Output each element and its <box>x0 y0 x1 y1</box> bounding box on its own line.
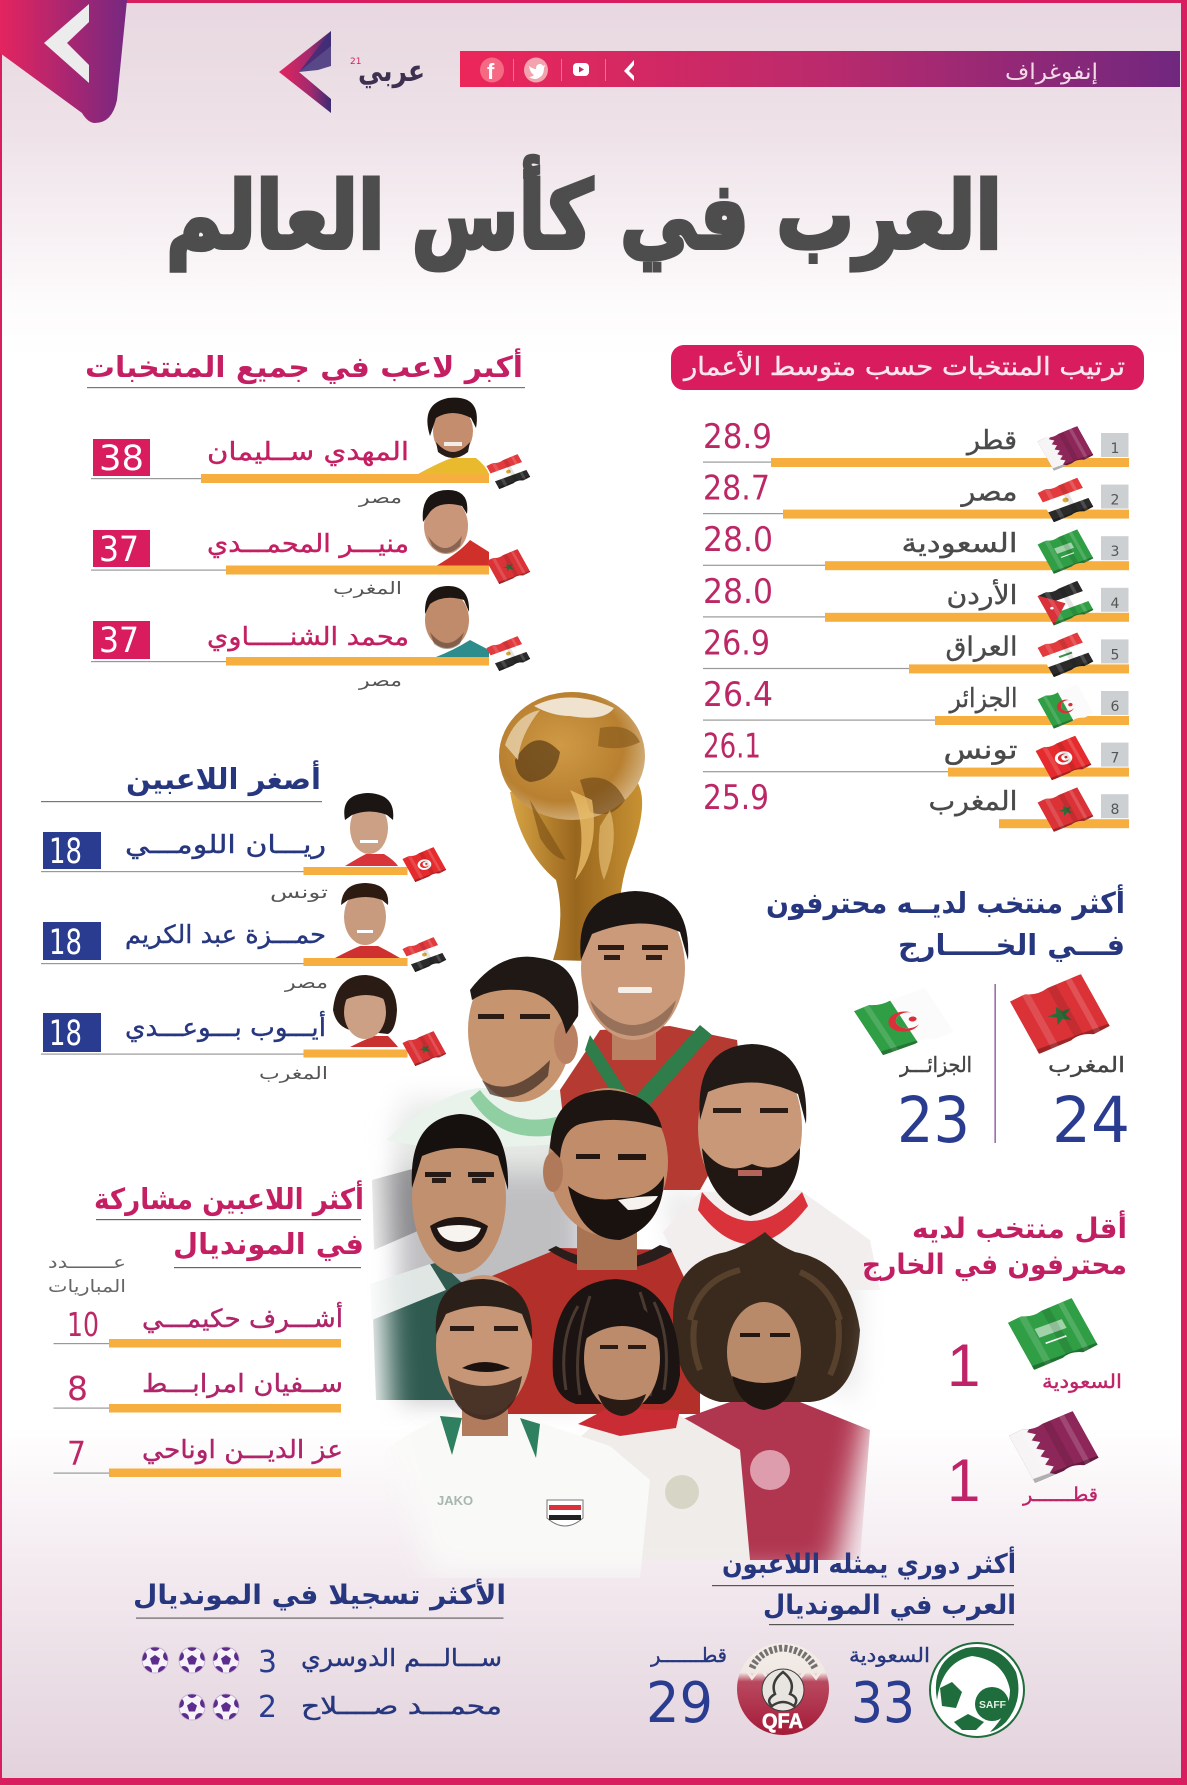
scorer row 2: 2 <box>258 1690 277 1725</box>
stat: Morocco <box>1048 1053 1130 1157</box>
player: Al-Dawsari <box>370 1114 508 1400</box>
youngest row 3: المغرب <box>259 1064 328 1084</box>
row 1 <box>703 417 1129 471</box>
flag: Algeria <box>853 988 955 1055</box>
top bar <box>460 51 1180 87</box>
player: Mahrez <box>386 957 578 1150</box>
abroad heading <box>766 884 1125 962</box>
player: Afif <box>673 1232 870 1560</box>
scorer row 2: محمـــد صــــلاح <box>301 1692 502 1720</box>
logo: SAFF: SAFF <box>979 1700 1006 1711</box>
row 6: 6 <box>1111 699 1120 715</box>
jersey badge <box>547 1500 583 1526</box>
row 5 <box>703 623 1129 677</box>
stat: Saudi league: السعودية <box>849 1643 930 1667</box>
abroad heading: فـــي الخـــــارج <box>898 928 1125 962</box>
oldest row 2: منيـــر المحمـــدي <box>207 529 409 558</box>
row 8: 25.9 <box>703 778 769 818</box>
panel: top leagues <box>646 1546 1024 1737</box>
logo: Arabi21: عربي <box>358 54 425 89</box>
oldest row 3: محمد الشنـــــاوي <box>207 622 409 652</box>
jersey text: JAKO <box>437 1493 473 1508</box>
leagues heading <box>712 1546 1016 1625</box>
corner logo <box>0 0 127 123</box>
collage backdrop shadow <box>395 1100 860 1400</box>
panel: most appearances <box>48 1180 364 1477</box>
row 3: السعودية <box>902 529 1018 559</box>
row 6 <box>703 675 1129 729</box>
appearances row 3 <box>54 1434 343 1477</box>
youngest row 2: حمـــزة عبد الكريم <box>125 920 326 950</box>
stat: Qatar league: قطـــــــر <box>650 1643 727 1667</box>
ranking heading <box>671 345 1144 390</box>
player collage <box>370 891 880 1578</box>
oldest row 1: 38 <box>99 439 144 479</box>
player: Bennacer <box>553 1279 750 1560</box>
stat: Morocco: المغرب <box>1048 1053 1125 1077</box>
leagues heading: أكثر دوري يمثله اللاعبون <box>722 1546 1016 1580</box>
appearances row 2: ســفيان امرابـــط <box>142 1369 343 1398</box>
row 8 <box>703 778 1129 832</box>
row 3: 3 <box>1111 544 1119 560</box>
stat: Algeria: الجزائـــر <box>899 1053 972 1077</box>
row 3: 28.0 <box>703 520 773 560</box>
leagues heading: العرب في المونديال <box>763 1590 1016 1621</box>
scorers heading: الأكثر تسجيلا في المونديال <box>133 1578 506 1611</box>
player photo: Mohamed El Shenawy <box>425 586 489 657</box>
logo: QFA <box>737 1643 829 1735</box>
matches label: المباريات <box>48 1277 126 1297</box>
stat: Qatar league: 29 <box>646 1671 713 1736</box>
scorer row 1 <box>137 1641 502 1680</box>
logo: SAFF <box>930 1643 1024 1737</box>
player photo: Al-Mahdi Soliman <box>418 398 489 474</box>
icon: twitter <box>524 58 548 82</box>
row 8: 8 <box>1111 802 1119 818</box>
scorer row 2 <box>174 1688 502 1725</box>
panel: fewest players abroad <box>862 1210 1127 1514</box>
trophy <box>499 692 645 962</box>
logo: QFA: QFA <box>762 1710 803 1733</box>
stat: Algeria <box>897 1053 972 1157</box>
oldest row 3: 37 <box>99 621 139 661</box>
youngest row 2 <box>41 883 447 993</box>
row 2 <box>703 469 1129 522</box>
player: Tunisia <box>663 1044 880 1290</box>
youngest row 1: تونس <box>270 883 328 903</box>
panel: oldest players <box>85 348 531 691</box>
youngest row 1 <box>41 793 447 903</box>
flag: Morocco <box>1009 974 1111 1054</box>
row 5: العراق <box>946 632 1018 662</box>
oldest row 2: 37 <box>99 530 139 570</box>
youngest heading: أصغر اللاعبين <box>126 760 321 796</box>
flag: Saudi Arabia <box>1007 1298 1099 1370</box>
row 5: 26.9 <box>703 623 770 663</box>
youngest row 3 <box>41 975 447 1084</box>
oldest row 3: مصر <box>358 671 402 691</box>
player: Hakimi <box>560 891 745 1190</box>
icon: logo mark <box>624 60 634 81</box>
matches label: عـــــــدد <box>48 1253 126 1273</box>
ranking heading: ترتيب المنتخبات حسب متوسط الأعمار <box>682 350 1125 381</box>
stat: Algeria: 23 <box>897 1084 970 1157</box>
appearances row 3: 7 <box>67 1434 86 1473</box>
fewest heading: محترفون في الخارج <box>862 1248 1127 1282</box>
youngest row 2: 18 <box>49 923 82 963</box>
panel: top scorers <box>133 1578 506 1725</box>
oldest row 1: المهدي ســليمان <box>207 437 409 467</box>
appearances row 2: 8 <box>67 1369 88 1408</box>
row 7: 7 <box>1111 751 1119 767</box>
row 1: قطر <box>965 426 1017 456</box>
row 2: 28.7 <box>703 469 770 509</box>
stat: Qatar: 1 <box>947 1447 980 1514</box>
icon: youtube <box>573 63 589 76</box>
appearances heading: أكثر اللاعبين مشاركة <box>94 1180 364 1216</box>
panel: youngest players <box>41 760 447 1084</box>
appearances row 2 <box>54 1369 343 1412</box>
appearances row 1: أشـــرف حكيمـــي <box>142 1301 343 1333</box>
stat: Qatar <box>947 1447 1098 1514</box>
logo: Arabi21 <box>279 31 425 113</box>
oldest heading: أكبر لاعب في جميع المنتخبات <box>85 348 523 384</box>
oldest row 1 <box>91 398 531 508</box>
panel: most players abroad <box>766 884 1130 1157</box>
abroad heading: أكثر منتخب لديــه محترفون <box>766 884 1125 920</box>
fewest heading <box>862 1210 1127 1282</box>
scorer row 1: 3 <box>258 1645 277 1680</box>
youngest row 3: 18 <box>49 1014 82 1054</box>
logo: Arabi21: 21 <box>350 57 361 67</box>
stat: Saudi Arabia <box>947 1332 1122 1399</box>
divider <box>994 984 996 1143</box>
row 4: الأردن <box>946 578 1018 611</box>
stat: Morocco: 24 <box>1052 1084 1130 1157</box>
player photo: Rayan Elloumi <box>344 793 398 866</box>
row 7: تونس <box>944 736 1018 766</box>
appearances row 1: 10 <box>67 1305 99 1344</box>
stat: Saudi league: 33 <box>851 1671 915 1736</box>
row 2: مصر <box>959 478 1018 508</box>
scorer row 1: ســـالـــم الدوسري <box>301 1644 502 1672</box>
matches label <box>48 1253 126 1297</box>
player: Ali Adnan (Iraq) <box>427 1275 650 1574</box>
fewest heading: أقل منتخب لديه <box>912 1210 1127 1245</box>
oldest row 1: مصر <box>358 488 402 508</box>
stat: Saudi league <box>849 1643 930 1736</box>
youngest row 1: 18 <box>49 832 82 872</box>
row 2: 2 <box>1111 493 1119 509</box>
title: العرب في كأس العالم <box>166 156 1002 271</box>
row 4 <box>703 572 1129 626</box>
youngest row 2: مصر <box>284 973 328 993</box>
row 4: 28.0 <box>703 572 773 612</box>
panel: age ranking <box>671 345 1144 832</box>
stat: Saudi Arabia: السعودية <box>1042 1371 1122 1393</box>
youngest row 1: ريـــان اللومـــي <box>125 830 326 859</box>
youngest row 3: أيـــوب بـــوعـــدي <box>125 1010 326 1042</box>
player photo: Mounir El Mohammedi <box>423 490 489 566</box>
stat: Qatar league <box>646 1643 727 1736</box>
row 3 <box>703 520 1129 574</box>
row 6: 26.4 <box>703 675 773 715</box>
appearances row 3: عز الديـــن اوناحي <box>142 1435 343 1465</box>
row 8: المغرب <box>928 787 1018 817</box>
oldest row 3 <box>91 586 531 691</box>
player: Salah <box>470 1088 700 1414</box>
appearances heading: في المونديال <box>173 1227 364 1261</box>
row 5: 5 <box>1111 647 1119 663</box>
row 7: 26.1 <box>703 727 761 767</box>
player photo: Hamza Abdelkarim <box>335 883 400 958</box>
oldest row 2: المغرب <box>333 579 402 599</box>
row 1: 1 <box>1111 441 1119 457</box>
appearances row 1 <box>54 1301 343 1348</box>
row 6: الجزائر <box>948 684 1018 714</box>
icon: facebook: f <box>487 59 495 84</box>
icon: facebook <box>480 58 504 84</box>
oldest row 2 <box>91 490 531 599</box>
stat: Qatar: قطـــــــر <box>1022 1484 1098 1506</box>
row 4: 4 <box>1111 596 1120 612</box>
appearances heading <box>94 1180 364 1268</box>
row 7 <box>703 727 1129 780</box>
stat: Saudi Arabia: 1 <box>947 1332 980 1399</box>
bar label: إنفوغراف <box>1005 60 1098 85</box>
player photo: Ayoub Bouaddi <box>333 975 398 1047</box>
row 1: 28.9 <box>703 417 772 457</box>
flag: Qatar <box>1008 1411 1100 1483</box>
